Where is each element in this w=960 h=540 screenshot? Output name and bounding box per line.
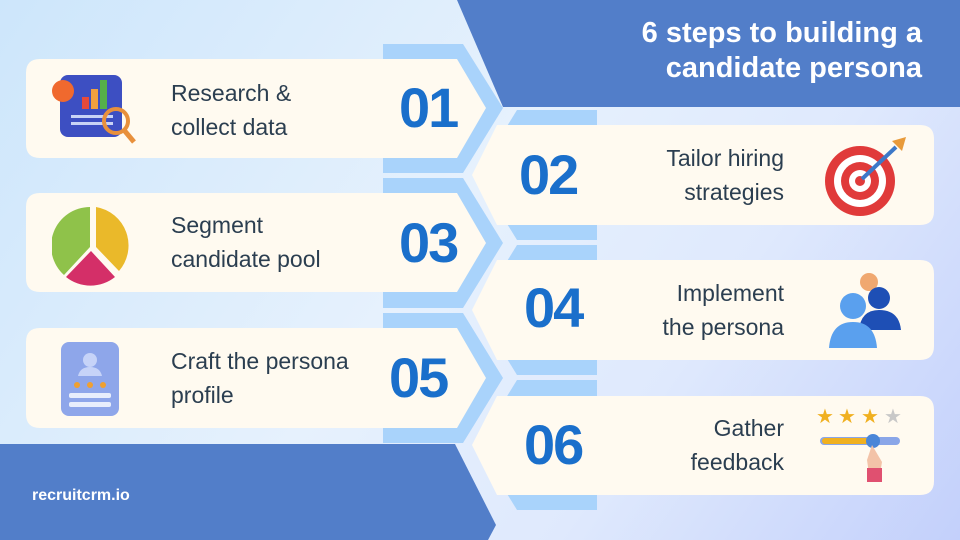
icon: profile card: [61, 342, 119, 416]
hex frames right: [477, 110, 597, 510]
text: collect data: [171, 114, 287, 140]
text: [171, 348, 349, 408]
text: Implement: [677, 280, 784, 306]
number: 02: [519, 143, 577, 206]
text: [171, 80, 291, 140]
text: [662, 280, 784, 340]
icon: target: [825, 137, 906, 216]
text: Tailor hiring: [666, 145, 784, 171]
number: 05: [389, 346, 447, 409]
number: 01: [399, 76, 457, 139]
icon: stars slider: [816, 406, 902, 482]
text: Craft the persona: [171, 348, 349, 374]
step 03: [52, 207, 458, 286]
text: profile: [171, 382, 234, 408]
cards left: [26, 59, 486, 428]
step 02: [519, 137, 906, 216]
number: 06: [524, 413, 582, 476]
icon: report with magnifier: [52, 75, 136, 144]
cards right: [472, 125, 934, 495]
number: 03: [399, 211, 457, 274]
text: [666, 145, 784, 205]
banner: footer background: [0, 444, 496, 540]
text: candidate pool: [171, 246, 321, 272]
step 04: [524, 273, 901, 348]
text: [690, 415, 784, 475]
text: Segment: [171, 212, 263, 238]
text: [171, 212, 321, 272]
title: 6 steps to building a candidate persona: [642, 17, 922, 84]
text: strategies: [684, 179, 784, 205]
text: feedback: [691, 449, 784, 475]
hex frames left: [383, 44, 503, 443]
text: Research &: [171, 80, 291, 106]
number: 04: [524, 276, 582, 339]
text: the persona: [663, 314, 784, 340]
step 06: [524, 406, 902, 482]
step 01: [52, 75, 458, 144]
icon: people: [829, 273, 901, 348]
step 05: [61, 342, 448, 416]
icon: pie chart: [52, 207, 129, 286]
banner: title background: [457, 0, 960, 107]
footer: brand: recruitcrm.io: [32, 487, 130, 504]
text: Gather: [714, 415, 784, 441]
